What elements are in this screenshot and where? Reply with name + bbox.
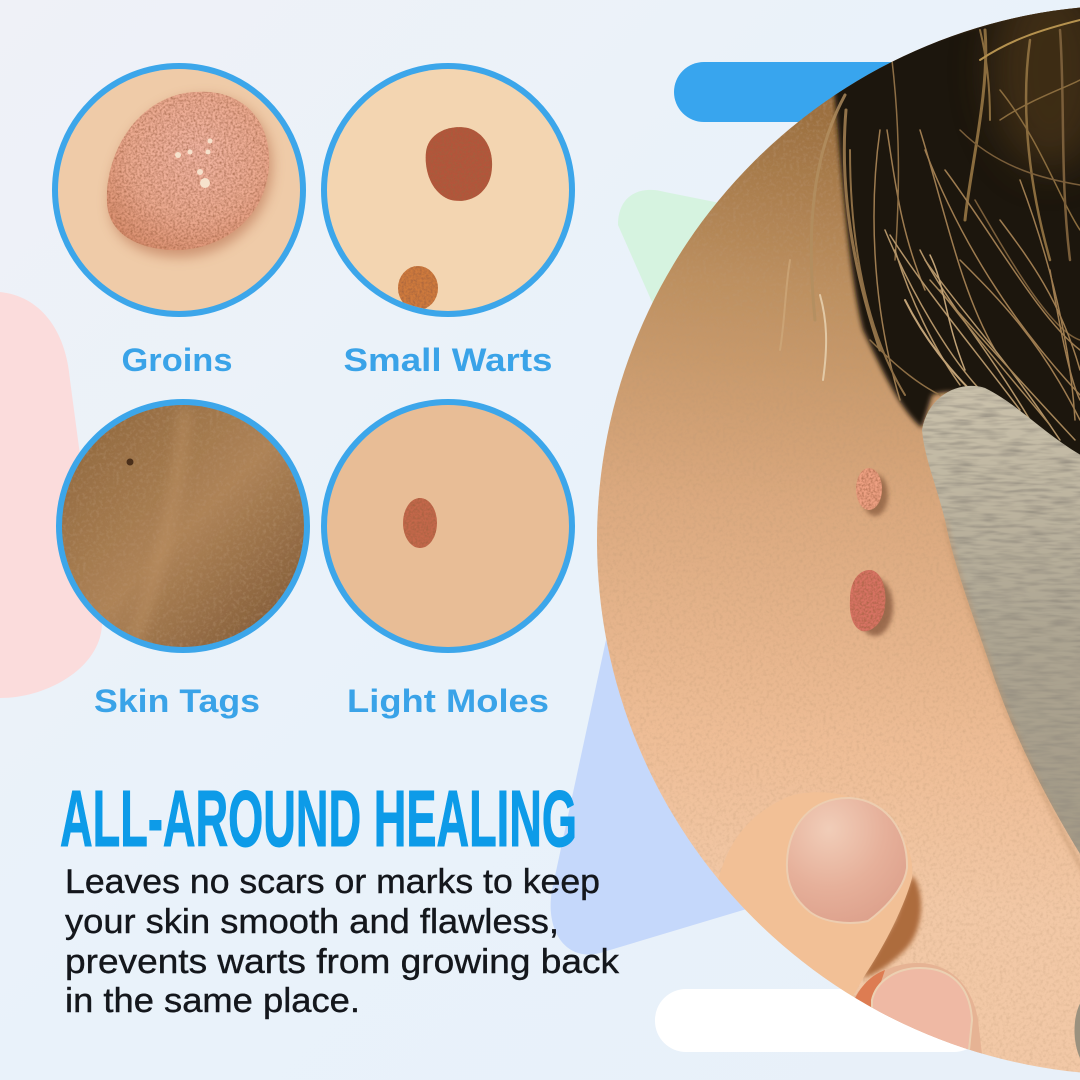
label: Groins: Groins	[122, 342, 232, 378]
upper wart	[856, 468, 882, 510]
label: Skin Tags: Skin Tags	[94, 683, 260, 719]
mole	[403, 498, 437, 548]
warm hair highlight	[990, 0, 1080, 170]
lower wart shadow	[857, 578, 893, 636]
body text: in the same place.	[65, 982, 360, 1020]
groin growth	[107, 92, 269, 250]
lower wart	[850, 570, 885, 631]
second finger	[854, 963, 982, 1054]
dark speck	[126, 458, 134, 466]
skin crease	[130, 410, 185, 650]
second finger red edge	[855, 970, 885, 1008]
body text: your skin smooth and flawless,	[65, 903, 559, 941]
decorative periwinkle shape	[551, 640, 760, 955]
heading: ALL-AROUND HEALING	[60, 774, 577, 863]
label: Small Warts: Small Warts	[344, 342, 552, 378]
decorative pink shape	[0, 292, 102, 698]
thumb	[718, 792, 912, 996]
photo circle: small warts	[320, 60, 580, 320]
second finger nail	[872, 968, 972, 1060]
body text: prevents warts from growing back	[65, 943, 620, 981]
photo circle: groins	[50, 60, 310, 320]
cloth corner bottom right	[1074, 1004, 1080, 1058]
skin	[590, 0, 1080, 1080]
shadow under ear	[945, 520, 1080, 875]
hair strands	[780, 20, 1080, 440]
wart skin	[327, 69, 569, 311]
decorative blue bar	[674, 62, 934, 122]
mole skin	[327, 405, 569, 647]
decorative white bar	[655, 989, 985, 1052]
photo circle: skin tags	[55, 400, 315, 660]
second wart	[398, 266, 438, 310]
thumb nail	[787, 798, 907, 923]
hair mass	[832, 0, 1080, 470]
groin skin	[58, 69, 300, 311]
label: Light Moles: Light Moles	[347, 683, 549, 719]
thumb shadow	[862, 875, 921, 978]
groin growth shadow	[110, 97, 272, 257]
photo circle: light moles	[320, 400, 580, 660]
photo: neck with warts	[590, 0, 1080, 1080]
body text: Leaves no scars or marks to keep	[65, 863, 600, 901]
ear fold: grey cloth	[922, 386, 1080, 870]
main wart	[426, 127, 492, 201]
groin flakes	[175, 138, 212, 188]
body text	[65, 863, 620, 1020]
decorative green shape	[618, 190, 730, 320]
upper wart shadow	[862, 474, 888, 516]
tag skin	[62, 405, 304, 647]
